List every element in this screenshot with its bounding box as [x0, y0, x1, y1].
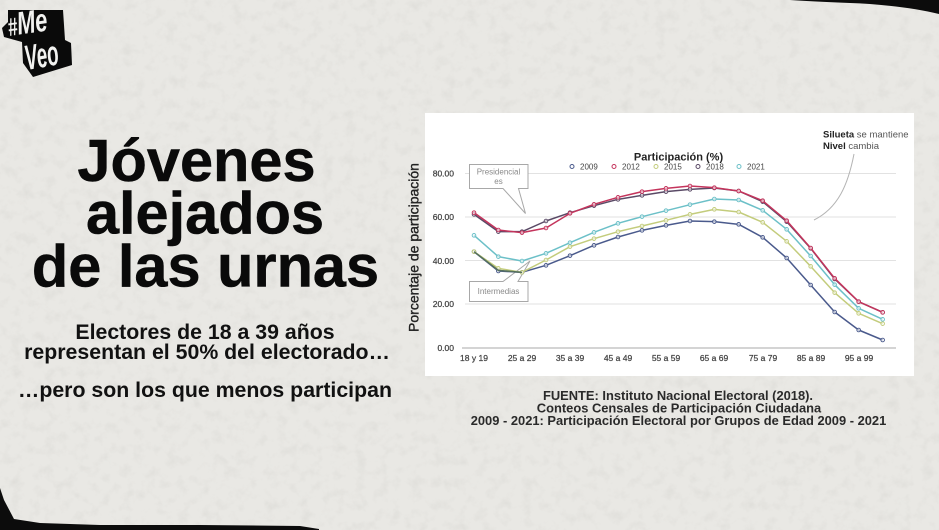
- dark overlap 2009-2018: [474, 252, 522, 272]
- x axis labels: 85 a 89: [797, 353, 825, 363]
- source note: FUENTE: Instituto Nacional Electoral (2018).: [543, 388, 813, 403]
- source note: 2009 - 2021: Participación Electoral por Grupos de Edad 2009 - 2021: [471, 413, 886, 428]
- callout: intermedias: [470, 261, 530, 302]
- series 2009: [474, 221, 883, 340]
- source note: [471, 388, 886, 428]
- x axis labels: 55 a 59: [652, 353, 680, 363]
- series 2018: [474, 188, 883, 312]
- y axis labels: 20.00: [433, 299, 454, 309]
- source note: Conteos Censales de Participación Ciudadana: [537, 400, 822, 416]
- x axis labels: 35 a 39: [556, 353, 584, 363]
- legend: 2021: [747, 162, 765, 172]
- data lines: [474, 186, 883, 340]
- y axis labels: [433, 168, 454, 353]
- legend: 2018: [706, 162, 724, 172]
- logo: #MeVeo: Veo: [22, 33, 61, 77]
- annotation: silueta: Nivel cambia: [823, 141, 880, 152]
- legend: 2012: [622, 162, 640, 172]
- title: alejados: [86, 180, 324, 246]
- chart title: Participación (%): [634, 152, 723, 164]
- y axis title: Porcentaje de participación: [406, 163, 422, 332]
- subtitle: electores: …pero son los que menos participan: [18, 378, 392, 402]
- annotation: silueta: [814, 130, 909, 220]
- x axis labels: 65 a 69: [700, 353, 728, 363]
- callout: presidenciales: es: [494, 177, 503, 186]
- x axis labels: [460, 353, 873, 363]
- subtitle: electores: representan el 50% del electorado…: [24, 340, 390, 364]
- legend: 2009: [580, 162, 598, 172]
- x axis labels: 45 a 49: [604, 353, 632, 363]
- x axis labels: 95 a 99: [845, 353, 873, 363]
- series 2015: [474, 209, 883, 324]
- x axis labels: 75 a 79: [749, 353, 777, 363]
- series 2012: [474, 186, 883, 312]
- subtitle: electores: [18, 320, 392, 402]
- title: de las urnas: [32, 232, 379, 300]
- series 2021: [474, 199, 883, 319]
- annotation: silueta: Silueta se mantiene: [823, 130, 909, 140]
- logo: #MeVeo: #Me: [5, 1, 49, 43]
- title: Jóvenes: [77, 127, 316, 194]
- y axis labels: 40.00: [433, 256, 454, 266]
- y axis labels: 0.00: [437, 343, 454, 353]
- legend: 2015: [664, 162, 682, 172]
- legend: [570, 162, 765, 172]
- panel: line chart: [406, 113, 914, 376]
- title: [32, 127, 379, 300]
- y axis labels: 80.00: [433, 168, 454, 178]
- x axis labels: 25 a 29: [508, 353, 536, 363]
- callout: intermedias: Intermedias: [478, 287, 519, 296]
- logo: #MeVeo: [2, 1, 72, 77]
- callout: presidenciales: Presidencial: [477, 168, 521, 176]
- subtitle: electores: Electores de 18 a 39 años: [75, 320, 335, 344]
- callout: presidenciales: [470, 164, 528, 214]
- y axis labels: 60.00: [433, 212, 454, 222]
- x axis labels: 18 y 19: [460, 353, 488, 363]
